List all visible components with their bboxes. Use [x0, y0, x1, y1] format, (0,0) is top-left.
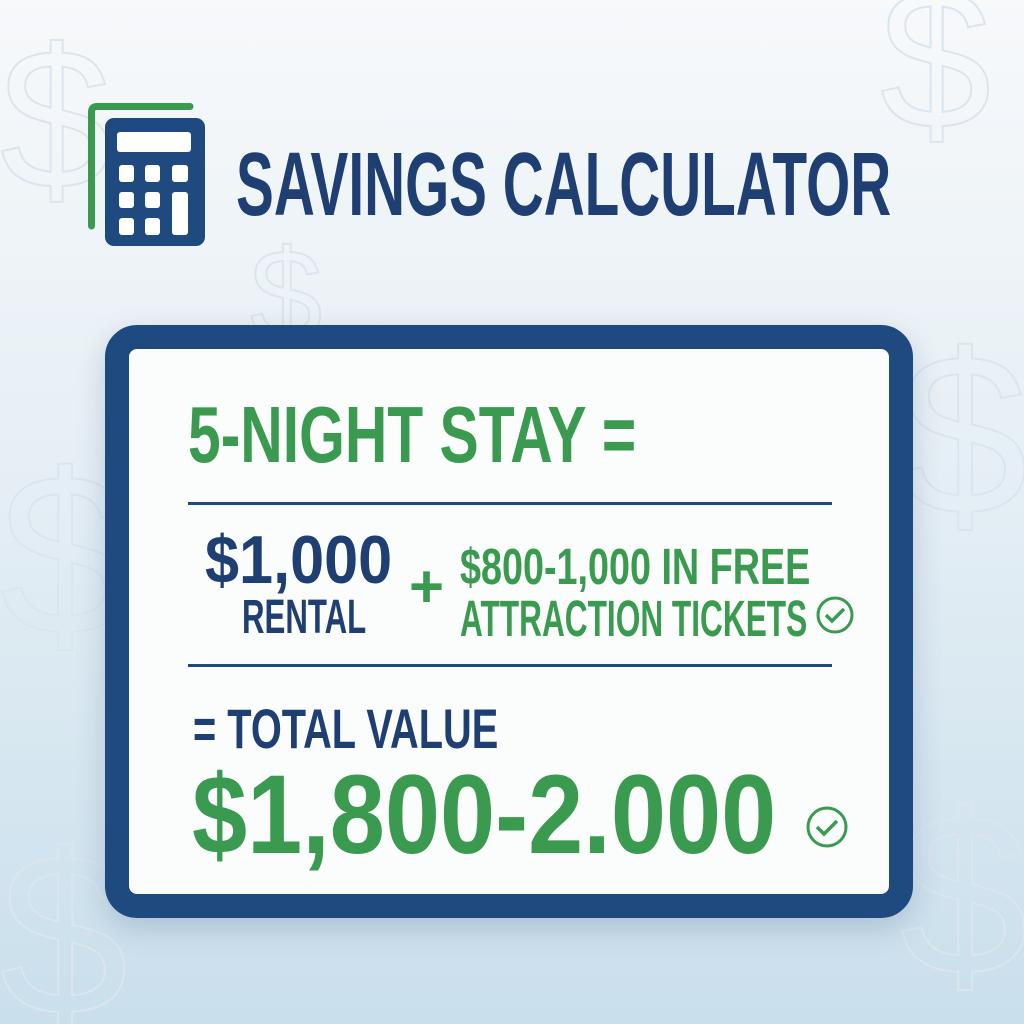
- icon: calculator: [88, 103, 205, 246]
- title: SAVINGS CALCULATOR: [236, 135, 891, 235]
- panel: calculation card: $1,800-2.000: [192, 752, 776, 877]
- panel: calculation card: ATTRACTION TICKETS: [460, 590, 807, 647]
- panel: calculation card: RENTAL: [242, 591, 366, 644]
- panel: calculation card: [105, 325, 913, 918]
- heading: 5-night stay: 5-NIGHT STAY =: [188, 390, 636, 479]
- text: rental: $1,000: [205, 522, 392, 598]
- icon: check: [816, 596, 854, 634]
- icon: check: [806, 806, 848, 848]
- text: total value: = TOTAL VALUE: [193, 697, 498, 760]
- text: tickets: $800-1,000 IN FREE: [460, 538, 810, 595]
- icon: plus: +: [409, 553, 444, 620]
